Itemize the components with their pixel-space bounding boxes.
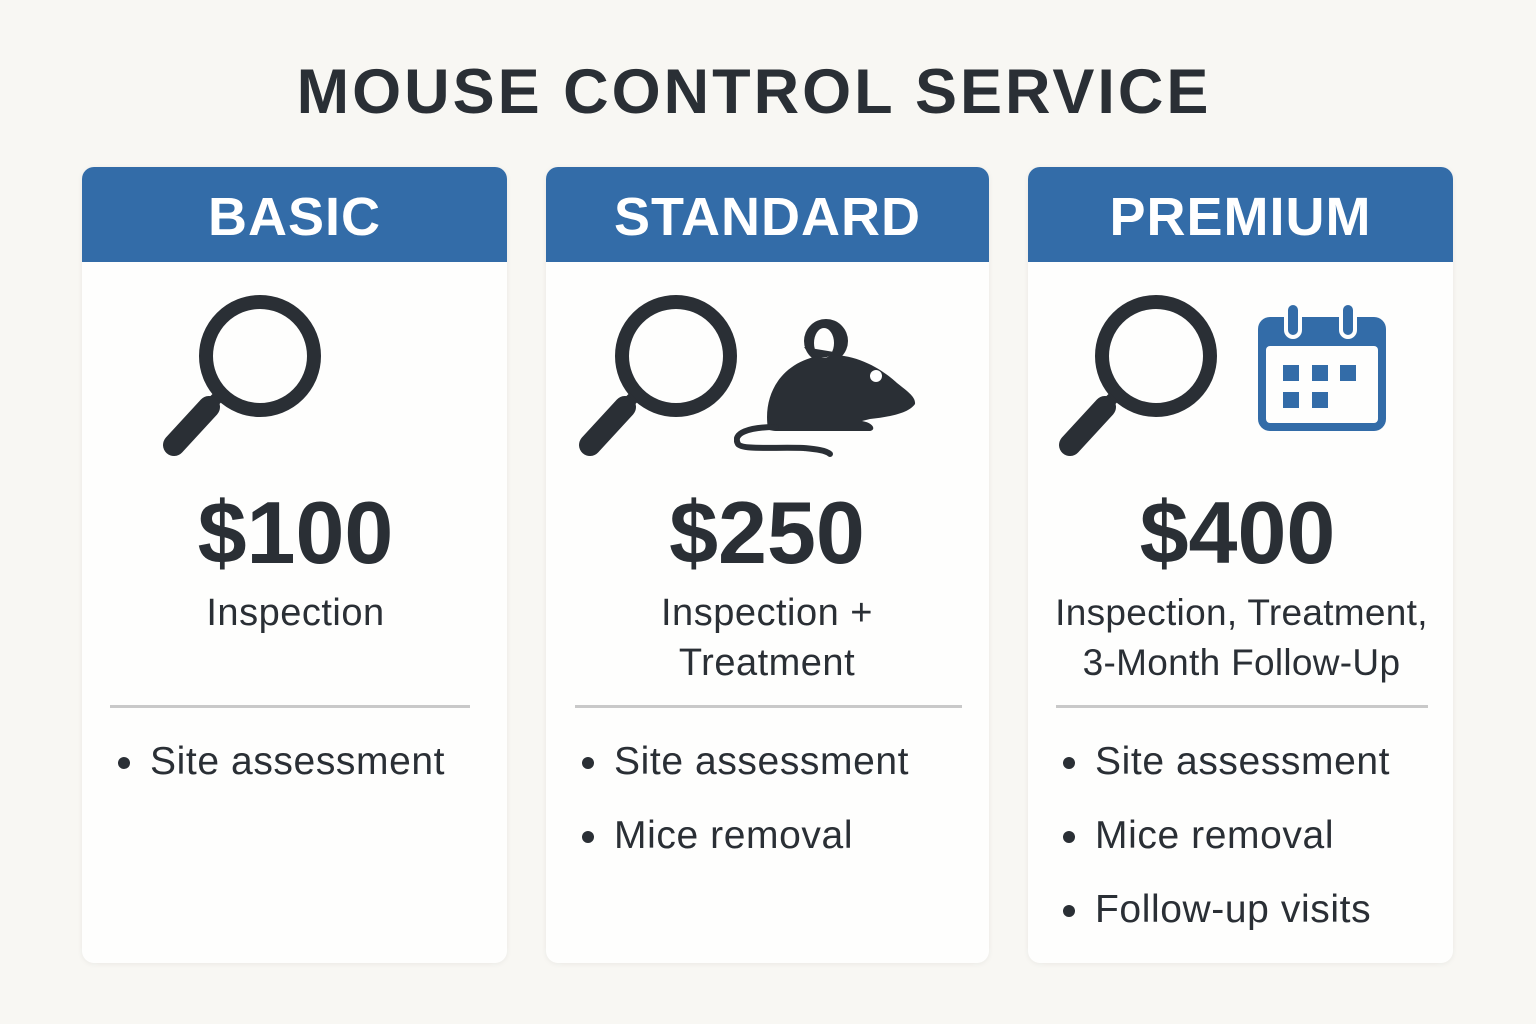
description: [1055, 592, 1428, 683]
price: $100: [198, 483, 393, 582]
price: $400: [1140, 483, 1335, 582]
description: Inspection: [206, 592, 385, 634]
bullet list: [1063, 740, 1390, 931]
bullet list: Site assessment: [150, 740, 445, 783]
bullet list: Mice removal: [614, 814, 853, 857]
panel: premium: [1028, 167, 1453, 963]
description: [661, 592, 873, 684]
description: 3-Month Follow-Up: [1083, 642, 1400, 683]
panel: standard: [546, 167, 989, 963]
icon: mouse: [734, 319, 916, 457]
icon: magnifier: [1059, 295, 1217, 456]
bullet list: [582, 740, 909, 857]
icon: magnifier: [163, 295, 321, 456]
icon: calendar: [1258, 305, 1386, 431]
bullet list: Site assessment: [614, 740, 909, 783]
header: standard: STANDARD: [614, 187, 921, 247]
header: basic: [82, 167, 507, 262]
bullet list: Site assessment: [1095, 740, 1390, 783]
title: MOUSE CONTROL SERVICE: [297, 57, 1211, 127]
icon: magnifier: [579, 295, 737, 456]
header: premium: PREMIUM: [1110, 187, 1372, 247]
description: Inspection, Treatment,: [1055, 592, 1428, 633]
panel: basic: [82, 167, 507, 963]
description: Treatment: [679, 642, 855, 684]
bullet list: Mice removal: [1095, 814, 1334, 857]
description: Inspection +: [661, 592, 873, 634]
price: $250: [669, 483, 865, 582]
header: standard: [546, 167, 989, 262]
bullet list: Follow-up visits: [1095, 888, 1371, 931]
header: basic: BASIC: [208, 187, 381, 247]
header: premium: [1028, 167, 1453, 262]
